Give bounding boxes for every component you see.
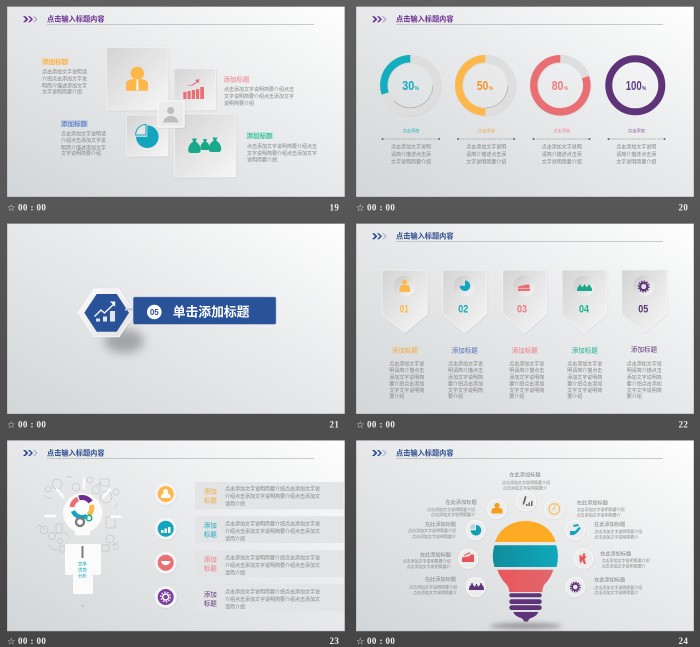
label top: 点击添加文字说明简要介绍	[502, 479, 550, 485]
slide 23: bulb figure and list	[7, 440, 345, 631]
column text 4: 添加标题	[572, 345, 598, 354]
row 2: 介绍点击添加文字说明简要介绍点击添加文	[225, 528, 320, 535]
tag 01	[382, 270, 427, 333]
column text 3: 文字文字说明简	[509, 387, 544, 394]
row 3: 介绍点击添加文字说明简要介绍点击添加文	[225, 562, 320, 569]
label right 2: 点击添加文字说明简要介绍	[594, 528, 642, 534]
column text 5: 添加标题	[631, 345, 658, 354]
footer 21	[7, 420, 339, 431]
column text 2: 点击添加文字说	[448, 360, 483, 368]
caption column 1: 点击添加文字说明	[391, 144, 431, 150]
footer 19	[7, 202, 339, 214]
footer 23: 00 : 00	[18, 636, 46, 646]
label right 3	[600, 549, 650, 568]
column text 4: 要介绍点击添加	[567, 380, 602, 388]
card: centre portrait	[158, 101, 184, 127]
light rays	[46, 479, 120, 517]
header 22	[372, 232, 663, 242]
caption column 2: 点击添加文字说明	[466, 144, 506, 150]
icon: climber	[516, 492, 536, 511]
tag 04: 04	[579, 304, 590, 316]
header 19	[23, 14, 314, 25]
column text 1: 添加文字说明简	[389, 374, 424, 381]
label right 4: 点击添加文字说明简要介	[594, 589, 638, 595]
column text 3: 要介绍	[509, 393, 524, 400]
text: orange heading: 介绍点击添加文字说	[42, 76, 87, 82]
header 22: 点击输入标题内容	[396, 232, 454, 240]
column text 2: 明请简介描点击	[448, 367, 483, 374]
text: orange heading	[42, 57, 87, 96]
label left 1: 在此添加标题	[446, 498, 477, 506]
column text 2	[448, 345, 483, 400]
row 2: 请简介绍	[225, 536, 245, 543]
title ribbon: 单击添加标题	[173, 304, 250, 320]
text: orange heading: 添加标题	[42, 57, 68, 66]
label left 1: 点击添加文字说明简要介绍	[427, 506, 475, 512]
column text 1: 明请简介描点击	[389, 367, 424, 374]
header 23: 点击输入标题内容	[47, 448, 105, 458]
column text 1: 要介绍	[389, 393, 404, 400]
row 2: 点击添加文字说明简要介绍点击添加文字说	[225, 520, 320, 527]
text: blue heading: 点击添加文字说明请	[61, 130, 106, 138]
label left 3	[403, 550, 451, 569]
caption column 2: 点击添加	[478, 127, 495, 134]
caption column 1	[382, 127, 440, 166]
footer 22: ☆	[356, 420, 365, 431]
icon: person	[488, 500, 506, 518]
ring 50%: 50	[477, 78, 488, 93]
label right 2: 点击添加文字说明简要介	[594, 534, 638, 540]
doodle icons	[36, 476, 119, 552]
hexagon shadow	[104, 329, 144, 353]
footer 22	[356, 420, 688, 431]
label right 3: 在此添加标题	[600, 549, 631, 557]
label top: 在此添加标题	[509, 470, 541, 478]
label top	[502, 470, 550, 490]
slide 21: section title	[7, 224, 345, 414]
footer 21: 21	[330, 420, 339, 430]
bulb figure: 分析	[78, 572, 87, 580]
column text 3	[509, 345, 544, 400]
label right 2	[594, 520, 642, 540]
tag 02	[443, 270, 487, 333]
slide 19: four cards	[7, 7, 345, 197]
tag 05: 05	[638, 304, 648, 316]
column text 2: 添加标题	[452, 345, 478, 354]
bulb figure	[63, 493, 102, 607]
label left 1: 点击添加文字说明简要介	[431, 511, 475, 517]
label left 4: 在此添加标题	[425, 575, 456, 583]
label right 4: 点击添加文字说明简要介绍	[594, 584, 642, 590]
label right 1: 点击添加文字说明简要介绍	[577, 506, 625, 512]
icon: pie	[466, 520, 485, 540]
label left 3: 点击添加文字说明简要介	[407, 563, 451, 569]
row 1	[155, 482, 344, 509]
footer 22: 00 : 00	[367, 420, 395, 430]
icon: runner	[574, 549, 593, 568]
caption column 4	[608, 127, 666, 166]
text: orange heading: 文字说明简要介绍	[42, 88, 82, 96]
label right 2: 在此添加标题	[594, 520, 625, 528]
label left 4	[409, 575, 457, 595]
caption column 3	[532, 127, 590, 166]
column text 2: 要介绍	[448, 393, 463, 400]
text: orange heading: 明简介描述添加文字	[42, 82, 87, 90]
main bulb	[493, 521, 558, 622]
row 4: 标题	[204, 599, 217, 608]
caption column 4: 点击添加文字说明	[616, 144, 656, 150]
footer 23: 23	[330, 636, 339, 646]
header 23	[23, 448, 314, 459]
column text 5: 点击添加文字说	[627, 360, 662, 368]
row 1: 介绍点击添加文字说明简要介绍点击添加文	[225, 493, 320, 500]
row 4: 请简介绍	[225, 604, 245, 611]
label left 2: 在此添加标题	[425, 520, 456, 528]
footer 19: 00 : 00	[18, 202, 46, 212]
label left 3: 点击添加文字说明简要介绍	[403, 558, 451, 564]
column text 1	[389, 345, 424, 400]
column text 5: 文字文字说明简	[627, 387, 662, 394]
row 4: 点击添加文字说明简要介绍点击添加文字说	[225, 588, 320, 595]
header 20	[372, 14, 663, 25]
label right 1: 点击添加文字说明简要介	[577, 512, 621, 518]
label right 3: 点击添加文字说明简要介	[602, 562, 646, 568]
footer 22: 22	[678, 420, 688, 430]
row 3: 请简介绍	[225, 570, 245, 577]
caption column 2	[457, 127, 515, 166]
bulb figure: 优势	[78, 566, 87, 574]
footer 19: 19	[330, 202, 339, 212]
slide 22: five tags	[356, 224, 694, 414]
row 1: 点击添加文字说明简要介绍点击添加文字说	[225, 485, 320, 492]
text: blue heading	[61, 119, 106, 157]
column text 3: 点击添加文字说	[509, 360, 544, 368]
text: green heading: 点击添加文字说明简要介绍点击	[247, 143, 317, 150]
text: red heading: 说明简要介绍	[224, 100, 254, 107]
row 1: 请简介绍	[225, 501, 245, 508]
text: red heading: 添加标题	[224, 74, 250, 84]
ring 30%: 30	[402, 78, 414, 93]
label left 4: 点击添加文字说明简要介	[413, 589, 457, 595]
icon: money bags	[466, 578, 485, 596]
connector	[125, 308, 139, 311]
ring 80%: 80	[552, 78, 563, 93]
icon: gear	[566, 578, 585, 596]
icon: chart	[459, 549, 478, 568]
label top: 点击添加文字说明简要介	[503, 484, 547, 490]
footer 20	[356, 202, 688, 214]
ring 30%: %	[414, 86, 420, 92]
caption column 4: 文字说明简要介绍	[616, 158, 656, 166]
caption column 4: 点击添加	[628, 127, 645, 134]
ring 100%: 100	[626, 78, 642, 93]
column text 4: 要介绍	[567, 393, 582, 400]
row 2: 标题	[204, 530, 217, 539]
bulb shadow	[490, 623, 562, 629]
caption column 2: 文字说明简要介绍	[466, 158, 506, 166]
label right 1	[577, 499, 625, 518]
ring 50%: %	[489, 86, 494, 92]
text: blue heading: 介绍点击添加文字说	[61, 137, 106, 144]
caption column 1: 文字说明简要介绍	[391, 158, 431, 166]
card: person	[106, 48, 168, 110]
label left 3: 在此添加标题	[420, 550, 451, 558]
hexagon badge	[78, 289, 135, 337]
column text 3: 要介绍点击添加	[509, 380, 544, 388]
footer 23	[7, 636, 339, 647]
caption column 3: 请简介描述点击添	[542, 151, 582, 158]
label right 4	[594, 576, 642, 595]
row 3: 添加	[204, 554, 217, 563]
label right 3: 点击添加文字说明简要介绍	[602, 557, 650, 563]
icon: handshake	[566, 520, 585, 540]
column text 3: 添加标题	[512, 345, 538, 354]
column text 5	[627, 345, 662, 400]
card: pie chart	[126, 115, 168, 156]
tag 01: 01	[400, 304, 409, 316]
bulb figure: 竞争	[78, 560, 87, 568]
column text 5: 明请简介描点击	[627, 367, 662, 374]
ring 80%: %	[564, 86, 569, 92]
footer 19: ☆	[7, 203, 16, 214]
column text 1: 添加标题	[392, 345, 418, 354]
caption column 1: 点击添加	[403, 127, 419, 134]
label left 2: 点击添加文字说明简要介绍	[408, 527, 456, 533]
row 2	[155, 516, 344, 543]
text: blue heading: 添加标题	[61, 119, 88, 128]
text: green heading: 说明简要介绍	[247, 156, 277, 164]
text: green heading: 添加标题	[246, 131, 273, 140]
slide 20: progress rings	[356, 7, 694, 197]
text: green heading	[246, 131, 317, 164]
title ribbon: 05	[150, 308, 159, 317]
footer 24: 24	[678, 636, 688, 646]
row 1: 添加	[204, 486, 217, 495]
column text 2: 添加文字说明简	[448, 374, 483, 381]
header 24	[372, 448, 663, 459]
column text 1: 点击添加文字说	[389, 360, 424, 368]
row 3: 标题	[204, 564, 217, 573]
header 24: 点击输入标题内容	[396, 448, 454, 458]
gears in bulb	[72, 497, 92, 526]
column text 2: 要介绍点击添加	[448, 380, 483, 388]
column text 1: 文字文字说明简	[389, 387, 424, 394]
label left 2: 点击添加文字说明简要介	[412, 533, 456, 539]
ring 50%	[459, 59, 512, 112]
tag 03: 03	[517, 304, 527, 316]
column text 4	[567, 345, 602, 400]
card: money bags	[174, 114, 236, 177]
column text 4: 文字文字说明简	[567, 387, 602, 394]
column text 5: 要介绍点击添加	[627, 380, 662, 388]
footer 24: 00 : 00	[367, 636, 395, 646]
header 19: 点击输入标题内容	[47, 14, 105, 24]
caption column 3: 点击添加	[553, 127, 570, 134]
label left 2	[408, 520, 456, 539]
slide 24: light bulb diagram	[356, 440, 694, 631]
footer 24	[356, 636, 688, 647]
label right 1: 在此添加标题	[577, 499, 608, 507]
caption column 3: 文字说明简要介绍	[542, 158, 582, 166]
text: red heading: 点击添加文字说明简要介绍点击	[224, 86, 294, 93]
tag 05	[622, 270, 667, 333]
caption column 2: 请简介描述点击添	[466, 151, 506, 158]
column text 4: 点击添加文字说	[567, 360, 602, 368]
ring 80%	[534, 59, 587, 112]
column text 4: 明请简介描点击	[567, 367, 602, 374]
column text 2: 文字文字说明简	[448, 387, 483, 394]
label left 1	[427, 498, 477, 517]
ring 100%	[609, 59, 662, 112]
text: green heading: 文字说明简要介绍点击添加文字	[247, 150, 317, 157]
tag 04	[562, 270, 607, 333]
caption column 1: 请简介描述点击添	[391, 151, 431, 158]
ring 30%	[384, 59, 437, 112]
footer 20: ☆	[356, 203, 365, 214]
row 4: 添加	[204, 589, 217, 598]
footer 21: ☆	[7, 420, 16, 431]
tag 02: 02	[458, 304, 468, 316]
label right 4: 在此添加标题	[594, 576, 625, 584]
caption column 3: 点击添加文字说明	[542, 144, 582, 150]
column text 3: 明请简介描点击	[509, 367, 544, 374]
header 20: 点击输入标题内容	[396, 14, 454, 24]
column text 1: 要介绍点击添加	[389, 380, 424, 388]
icon: clock	[545, 500, 564, 518]
row 4	[155, 584, 344, 611]
text: red heading: 文字说明简要介绍点击添加文字	[224, 93, 294, 100]
title ribbon	[133, 297, 276, 324]
text: blue heading: 文字说明简要介绍	[61, 150, 101, 157]
row 3: 点击添加文字说明简要介绍点击添加文字说	[225, 554, 320, 561]
footer 20: 20	[678, 202, 688, 212]
caption column 4: 请简介描述点击添	[616, 151, 656, 158]
row 3	[155, 550, 344, 577]
text: blue heading: 明简介描述添加文字	[61, 144, 106, 152]
row 1: 标题	[204, 496, 217, 505]
ring 100%: %	[642, 86, 647, 92]
column text 3: 添加文字说明简	[509, 374, 544, 381]
column text 5: 添加文字说明简	[627, 374, 662, 381]
card: bar chart	[174, 68, 216, 110]
row 2: 添加	[204, 520, 217, 529]
label left 4: 点击添加文字说明简要介绍	[409, 584, 457, 590]
footer 21: 00 : 00	[18, 420, 46, 430]
row 4: 介绍点击添加文字说明简要介绍点击添加文	[225, 596, 320, 603]
column text 5: 要介绍	[627, 393, 642, 400]
column text 4: 添加文字说明简	[567, 374, 602, 381]
footer 20: 00 : 00	[367, 202, 395, 212]
text: orange heading: 点击添加文字说明请	[42, 68, 87, 76]
text: red heading	[224, 74, 294, 107]
tag 03	[503, 270, 547, 333]
